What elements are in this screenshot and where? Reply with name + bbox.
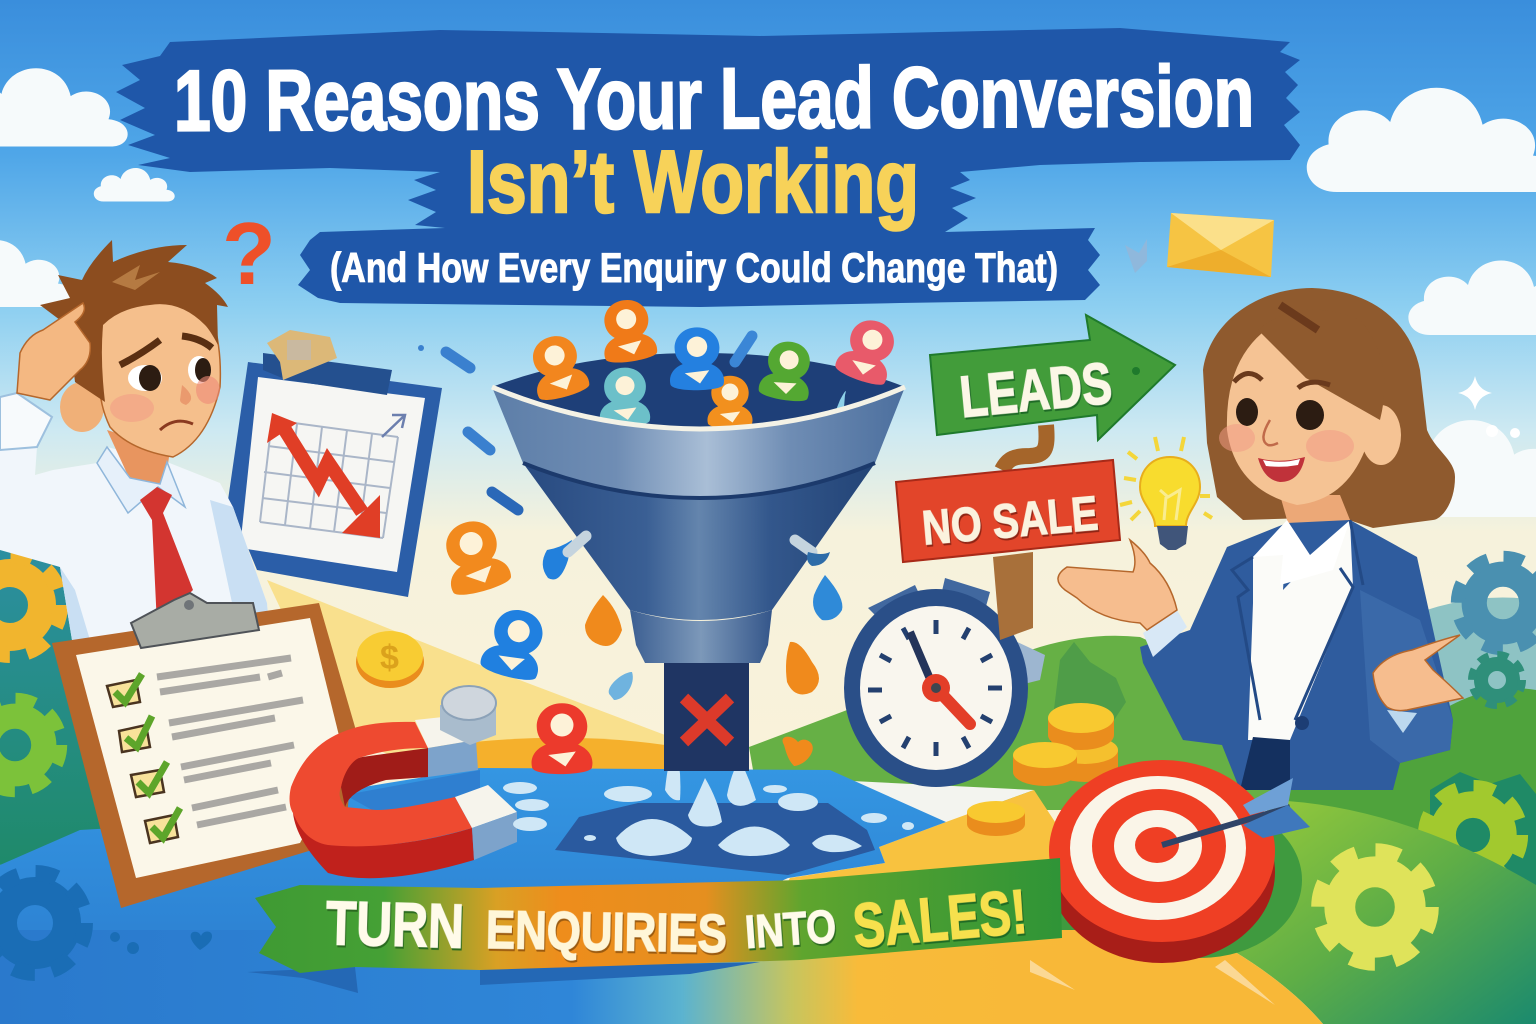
- left cuff: [1143, 610, 1187, 657]
- title: [174, 49, 1254, 291]
- person: confused man: [0, 240, 270, 640]
- face: [1227, 333, 1372, 505]
- stopwatch: [844, 578, 1045, 787]
- funnel spout: [664, 663, 749, 771]
- funnel: [492, 353, 905, 771]
- hair back: [1203, 288, 1455, 528]
- banner text: ENQUIRIES: [485, 900, 727, 964]
- banner text: TURN: [325, 889, 465, 962]
- sparkles: [1458, 376, 1520, 438]
- banner text: SALES!: [850, 878, 1030, 961]
- neck: [107, 430, 170, 485]
- lead icons leaking: [418, 345, 842, 774]
- funnel lower cone: [523, 463, 875, 620]
- leads sign: LEADS: [957, 351, 1115, 430]
- funnel bowl: [492, 387, 905, 498]
- leads sign: [930, 315, 1175, 440]
- coin stack: [967, 703, 1118, 836]
- collar: [97, 447, 185, 513]
- lead icons inside funnel: [600, 368, 846, 428]
- icon: coin: [356, 631, 424, 688]
- hills and ground: [0, 540, 1536, 1024]
- checklist clipboard: [52, 593, 355, 908]
- icon: envelope: [1125, 213, 1274, 277]
- banner ribbon: [247, 858, 1062, 993]
- no sale sign: NO SALE: [920, 487, 1100, 556]
- icon: light bulb: [1120, 437, 1212, 550]
- chart board: [228, 330, 442, 597]
- hair: [40, 240, 228, 402]
- ear: [1361, 405, 1401, 465]
- target and arrow: [1049, 760, 1310, 963]
- small decorations: [110, 932, 212, 954]
- lapels: [1232, 557, 1260, 720]
- icon: coin: $: [380, 639, 399, 677]
- eyes and brows: [1236, 398, 1258, 426]
- gears: [0, 555, 1536, 973]
- shirt: [0, 447, 270, 640]
- no sale sign: [896, 460, 1120, 562]
- title banner brush strokes: [116, 28, 1300, 307]
- fringe: [1258, 310, 1384, 420]
- right hand: [1373, 635, 1463, 711]
- neck: [1280, 495, 1350, 590]
- tie: [140, 487, 193, 625]
- skirt: [1240, 737, 1290, 790]
- signpost: [896, 315, 1175, 640]
- left hand: [1058, 540, 1177, 630]
- icon: magnet: [290, 686, 517, 878]
- funnel mouth: [492, 353, 905, 430]
- title: (And How Every Enquiry Could Change That): [330, 244, 1058, 291]
- mouth: [1258, 457, 1305, 482]
- banner text: INTO: [743, 900, 838, 958]
- eyes and brows: [128, 365, 162, 391]
- blazer: [1140, 520, 1453, 790]
- title: Isn’t Working: [467, 132, 919, 231]
- icon: red x: [684, 698, 730, 742]
- right cuff: [1387, 710, 1417, 733]
- lead icons entering funnel: [524, 297, 904, 404]
- ear: [60, 382, 104, 432]
- banner text: [325, 878, 1030, 964]
- clouds: [0, 68, 1536, 517]
- water puddle: [503, 742, 914, 875]
- hand: [17, 303, 90, 400]
- person: smiling woman: [1058, 288, 1463, 790]
- icon: question mark: ?: [222, 204, 276, 303]
- blouse: [1248, 520, 1353, 740]
- face: [99, 300, 220, 457]
